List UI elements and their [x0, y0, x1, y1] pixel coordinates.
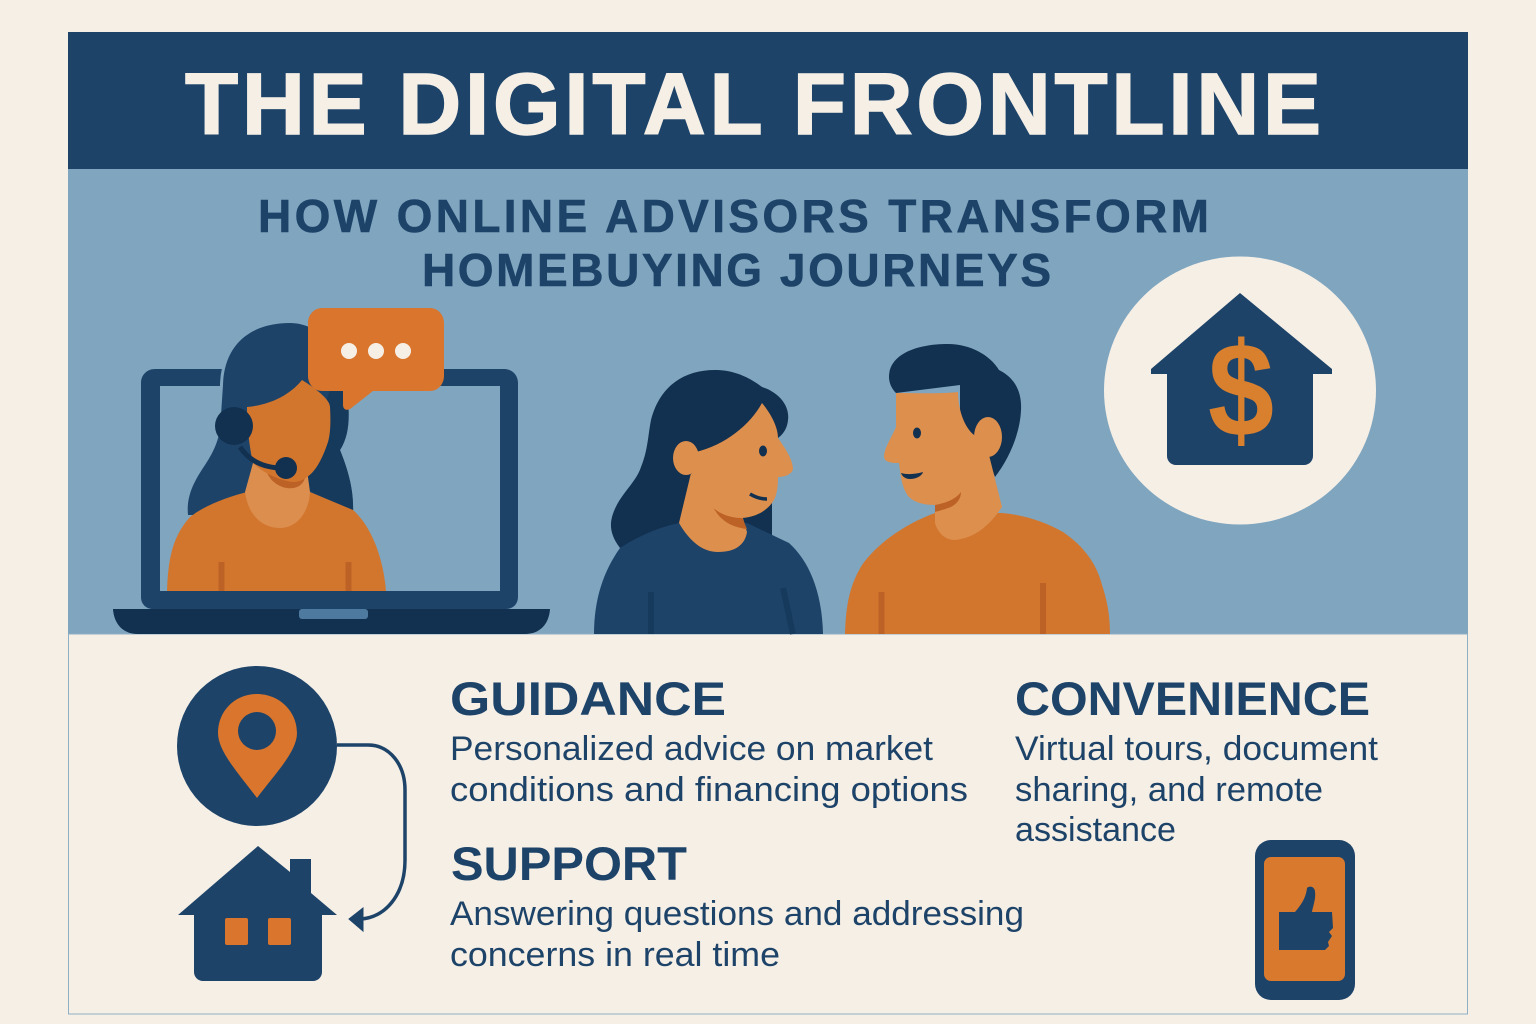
icon: house	[178, 846, 337, 981]
illustration: woman client	[594, 370, 823, 634]
icon: house with dollar sign: $	[1208, 316, 1274, 465]
laptop screen	[141, 369, 518, 609]
subtitle: HOMEBUYING JOURNEYS	[422, 244, 1051, 296]
advisor figure	[167, 323, 386, 591]
text block: convenience: assistance	[1015, 811, 1176, 849]
icon: phone with thumbs up	[1255, 840, 1355, 1000]
icon: location pin	[177, 666, 337, 826]
text block: support: concerns in real time	[450, 936, 780, 974]
text block: guidance	[450, 672, 968, 809]
icon: house with dollar sign	[1104, 256, 1376, 524]
arrow: pin to house	[337, 745, 405, 931]
title banner: THE DIGITAL FRONTLINE	[185, 56, 1321, 153]
subtitle: HOW ONLINE ADVISORS TRANSFORM	[258, 190, 1209, 242]
text block: guidance: GUIDANCE	[450, 672, 726, 725]
illustration: man client	[845, 344, 1110, 634]
text block: guidance: conditions and financing options	[450, 771, 968, 809]
panel: hero illustration background	[68, 168, 1468, 634]
text block: support: Answering questions and addressing	[450, 895, 1024, 933]
text block: convenience: Virtual tours, document	[1015, 730, 1379, 768]
icon: chat bubble	[308, 308, 444, 410]
illustration: laptop with advisor	[113, 308, 550, 634]
subtitle	[258, 190, 1209, 296]
text block: convenience: CONVENIENCE	[1015, 672, 1370, 725]
text block: convenience	[1015, 672, 1379, 849]
panel: lower content area	[68, 634, 1468, 1014]
text block: guidance: Personalized advice on market	[450, 730, 934, 768]
laptop base	[113, 609, 550, 634]
text block: support	[450, 837, 1024, 974]
text block: support: SUPPORT	[451, 837, 687, 890]
title banner	[68, 32, 1468, 169]
text block: convenience: sharing, and remote	[1015, 771, 1323, 809]
